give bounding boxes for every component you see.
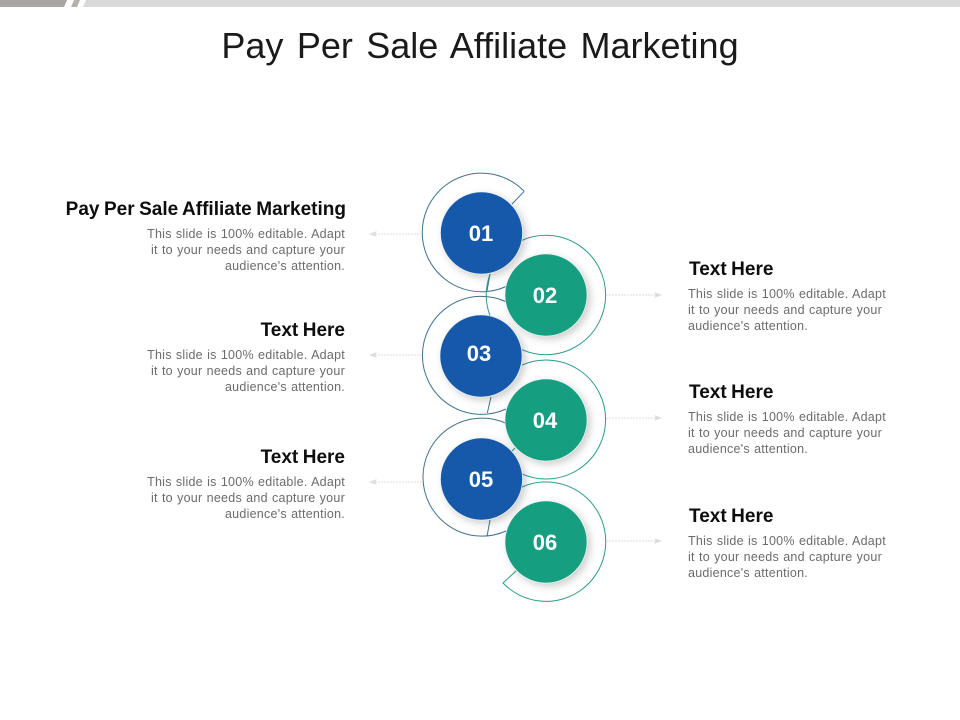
text block 05: it to your needs and capture your (151, 491, 345, 505)
text block 05 (147, 447, 345, 521)
ring 03 (422, 296, 506, 414)
circle 06 (505, 501, 587, 583)
arrow 01 (369, 231, 422, 237)
text block 02 (688, 259, 886, 333)
text block 01: Pay Per Sale Affiliate Marketing (66, 199, 346, 220)
ring 05 (423, 418, 506, 536)
circle 05 (440, 438, 522, 520)
text block 01: it to your needs and capture your (151, 243, 345, 257)
circle 01 (440, 192, 522, 274)
text block 06: audience's attention. (688, 566, 808, 580)
text block 04: it to your needs and capture your (688, 426, 882, 440)
text block 04: This slide is 100% editable. Adapt (688, 410, 886, 424)
ring diagram (422, 173, 606, 601)
text block 03: Text Here (261, 320, 345, 341)
text block 06: This slide is 100% editable. Adapt (688, 534, 886, 548)
text block 01 (66, 199, 346, 273)
text block 03: audience's attention. (225, 380, 345, 394)
ring 04 (512, 360, 606, 479)
text block 06 (688, 506, 886, 580)
arrow 03 (369, 352, 422, 358)
text block 02: Text Here (689, 259, 773, 280)
text block 06: Text Here (689, 506, 773, 527)
text block 02: This slide is 100% editable. Adapt (688, 287, 886, 301)
circle 01: 01 (469, 221, 493, 246)
text block 05: audience's attention. (225, 507, 345, 521)
text block 04 (688, 382, 886, 456)
arrow 06 (606, 538, 662, 544)
top decorative bar (0, 0, 960, 7)
text block 05: This slide is 100% editable. Adapt (147, 475, 345, 489)
arrow 04 (606, 415, 662, 421)
ring 01 (422, 173, 524, 292)
arrow 02 (606, 292, 662, 298)
circle 04: 04 (533, 408, 558, 433)
text block 02: it to your needs and capture your (688, 303, 882, 317)
ring 02 (486, 235, 606, 355)
circle 04 (505, 379, 587, 461)
circle 05: 05 (469, 467, 493, 492)
circle 06: 06 (533, 530, 557, 555)
circle 02 (505, 254, 587, 336)
title: Pay Per Sale Affiliate Marketing (221, 25, 739, 66)
text block 01: audience's attention. (225, 259, 345, 273)
arrow 05 (369, 479, 422, 485)
circle 02: 02 (533, 283, 557, 308)
text block 04: Text Here (689, 382, 773, 403)
text block 03: This slide is 100% editable. Adapt (147, 348, 345, 362)
text block 03: it to your needs and capture your (151, 364, 345, 378)
ring 06 (503, 482, 606, 601)
circle 03: 03 (467, 341, 491, 366)
text block 01: This slide is 100% editable. Adapt (147, 227, 345, 241)
text block 02: audience's attention. (688, 319, 808, 333)
text block 06: it to your needs and capture your (688, 550, 882, 564)
text block 03 (147, 320, 345, 394)
text block 04: audience's attention. (688, 442, 808, 456)
circle 03 (440, 315, 522, 397)
text block 05: Text Here (261, 447, 345, 468)
